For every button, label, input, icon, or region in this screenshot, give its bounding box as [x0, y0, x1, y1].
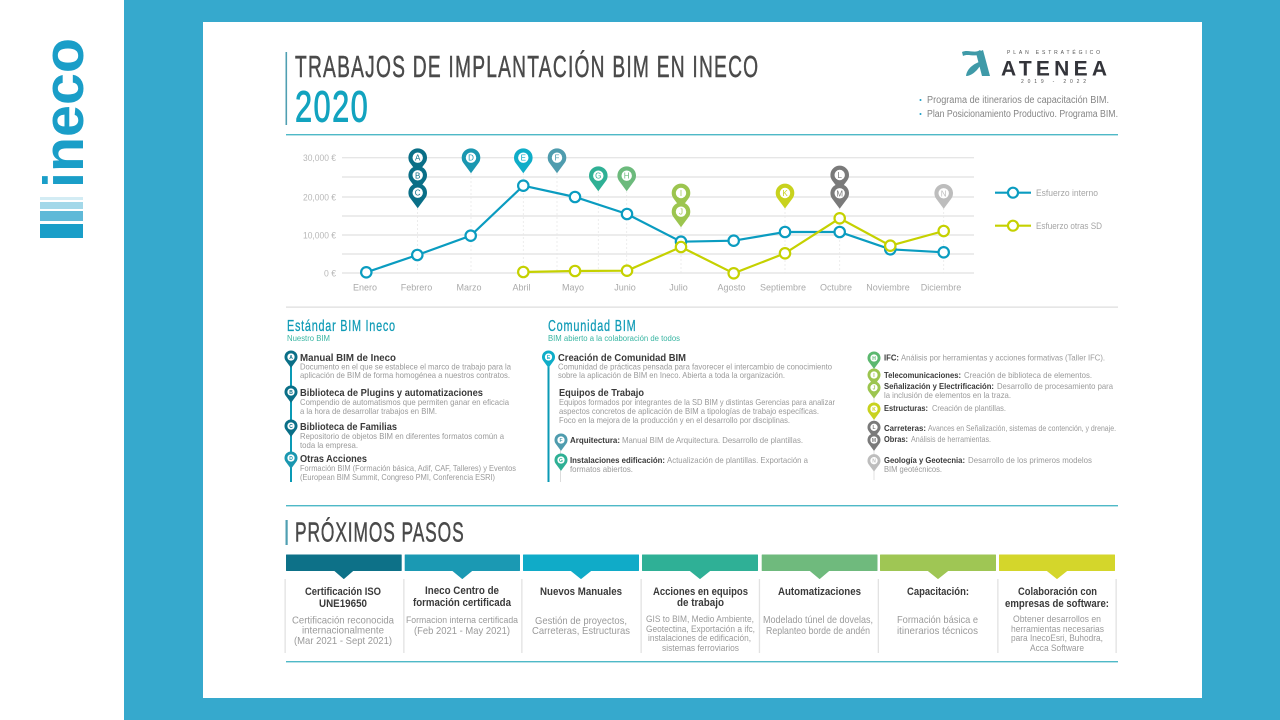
- x axis months: Agosto: [717, 282, 746, 292]
- x axis months: Abril: [512, 282, 531, 292]
- step 2: Ineco Centro de formación: (Feb 2021 - May 2021): [414, 625, 510, 637]
- chart milestone pins: [408, 148, 953, 227]
- x axis months: Febrero: [401, 282, 432, 292]
- item F: Arquitectura:: [570, 435, 620, 445]
- x axis months: Enero: [353, 282, 377, 292]
- item J: Señalización: Desarrollo de procesamiento para: [997, 381, 1113, 391]
- step 7: Colaboración con empresas: Obtener desarrollos en: [1013, 614, 1101, 624]
- step 7: Colaboración con empresas: empresas de software:: [1005, 598, 1109, 610]
- chart milestone pins: J: [679, 208, 683, 217]
- item: Equipos de Trabajo: Foco en la mejora de la producción y en el desarrollo por disciplinas.: [559, 415, 790, 425]
- x axis months: Noviembre: [866, 282, 910, 292]
- step 7: Colaboración con empresas: [1005, 586, 1109, 653]
- item D: Otras Acciones: [300, 453, 367, 465]
- item A: aplicación de BIM de forma homogénea a nuestros contratos.: [300, 370, 510, 380]
- item H: IFC: [867, 351, 1105, 369]
- item J: Señalización: la inclusión de elementos en la traza.: [884, 390, 1011, 400]
- chart milestone pins: K: [782, 189, 788, 198]
- item B: Biblioteca de Plugins y automatizaciones: [300, 387, 483, 399]
- item C: C: [289, 424, 293, 430]
- step 6: Capacitación: Formación básica e: [897, 614, 978, 626]
- chart legend: Esfuerzo otras SD: [1036, 221, 1102, 231]
- chart milestone pins: I: [680, 189, 682, 198]
- step 1: Certificación ISO: internacionalmente: [302, 624, 384, 636]
- item D: Formación BIM (Formación básica, Adif, CAF, Talleres) y Eventos: [300, 463, 516, 473]
- heading: Comunidad BIM: Comunidad BIM: [548, 317, 636, 335]
- item M: Obras: Obras:: [884, 434, 908, 444]
- item C: toda la empresa.: [300, 440, 358, 450]
- item E: Creación de Comunidad BIM: [558, 352, 686, 364]
- x axis months: Julio: [669, 282, 688, 292]
- next step banners: [286, 555, 1114, 578]
- step 4: Acciones en equipos: Geotectina, Exportación a ifc,: [646, 624, 755, 634]
- logo: Plan Estratégico Atenea: PLAN ESTRATÉGICO: [1007, 49, 1100, 56]
- panel: Estándar BIM Ineco: [284, 317, 516, 482]
- strategic programme bullets: Plan Posicionamiento Productivo. Programa BIM.: [927, 109, 1118, 120]
- item G: Actualización de plantillas. Exportación a: [667, 455, 808, 465]
- series: esfuerzo interno: [361, 180, 949, 277]
- item I: Telecomunicaciones: I: [873, 373, 875, 379]
- x axis months: Mayo: [562, 282, 584, 292]
- item: Equipos de Trabajo: aspectos concretos de aplicación de BIM a tipologías de trabajo específicas.: [559, 406, 819, 416]
- item G: formatos abiertos.: [570, 464, 633, 474]
- item: Equipos de Trabajo: Equipos de Trabajo: [559, 387, 644, 399]
- series: esfuerzo otras SD: [518, 213, 949, 278]
- step 5: Automatizaciones: [763, 586, 873, 637]
- item E: E: [547, 355, 551, 361]
- panel: disciplinas: [867, 351, 1116, 480]
- x axis months: Octubre: [820, 282, 852, 292]
- item M: Obras: Análisis de herramientas.: [911, 434, 991, 444]
- step 7: Colaboración con empresas: herramientas necesarias: [1011, 624, 1104, 634]
- item L: Carreteras: Avances en Señalización, sistemas de contención, y drenaje.: [928, 423, 1116, 433]
- step 2: Ineco Centro de formación: formación certificada: [413, 597, 512, 609]
- item C: Repositorio de objetos BIM en diferentes formatos común a: [300, 431, 504, 441]
- step 4: Acciones en equipos: instalaciones de edificación,: [648, 633, 751, 643]
- item K: Estructuras: Estructuras:: [884, 403, 928, 413]
- heading: Estándar BIM Ineco: Estándar BIM Ineco: [287, 317, 395, 335]
- item F: Manual BIM de Arquitectura. Desarrollo de plantillas.: [622, 435, 803, 445]
- x axis months: [353, 282, 961, 292]
- item A: A: [289, 355, 293, 361]
- item C: Biblioteca de Familias: [300, 421, 397, 433]
- item G: G: [559, 458, 563, 464]
- item A: Manual BIM de Ineco: [300, 352, 396, 364]
- step 6: Capacitación: itinerarios técnicos: [897, 625, 978, 637]
- item D: (European BIM Summit, Congreso PMI, Conferencia ESRI): [300, 472, 495, 482]
- step 2: Ineco Centro de formación: [406, 585, 518, 637]
- item M: Obras: M: [872, 438, 876, 444]
- item H: IFC: H: [872, 356, 876, 362]
- step 5: Automatizaciones: Replanteo borde de andén: [766, 625, 870, 637]
- step 7: Colaboración con empresas: Acca Software: [1030, 643, 1084, 653]
- item E: [542, 350, 832, 380]
- item D: [284, 451, 516, 482]
- item K: Estructuras: [867, 402, 1006, 420]
- item A: [284, 350, 511, 380]
- item M: Obras: [867, 433, 991, 451]
- step 5: Automatizaciones: Automatizaciones: [778, 586, 861, 598]
- item: Equipos de Trabajo: [559, 387, 835, 425]
- item B: a la hora de desarrollar trabajos en BIM.: [300, 406, 437, 416]
- item D: D: [289, 456, 293, 462]
- subheading: Nuestro BIM: Nuestro BIM: [287, 334, 330, 343]
- item G: Instalaciones edificación:: [570, 455, 665, 465]
- step 6: Capacitación: [897, 586, 978, 637]
- item J: Señalización: [867, 381, 1113, 400]
- logo: ineco: ineco: [32, 38, 96, 188]
- strategic programme bullets: [920, 95, 1118, 120]
- chart milestone pins: F: [555, 154, 560, 163]
- y axis labels: [303, 153, 336, 278]
- item L: Carreteras: L: [872, 425, 876, 431]
- y axis labels: 0 €: [324, 268, 336, 278]
- step 4: Acciones en equipos: GIS to BIM, Medio Ambiente,: [646, 614, 754, 624]
- chart milestone pins: B: [415, 171, 420, 180]
- step 7: Colaboración con empresas: para InecoEsri, Buhodra,: [1011, 633, 1103, 643]
- step 3: Nuevos Manuales: Carreteras, Estructuras: [532, 625, 630, 637]
- chart milestone pins: C: [415, 189, 421, 198]
- logo: Plan Estratégico Atenea: 2019 - 2022: [1021, 79, 1086, 85]
- step 4: Acciones en equipos: de trabajo: [677, 597, 724, 609]
- strategic programme bullets: Programa de itinerarios de capacitación BIM.: [927, 95, 1109, 106]
- y axis labels: 30,000 €: [303, 153, 336, 163]
- title block: [286, 49, 758, 132]
- step 3: Nuevos Manuales: Nuevos Manuales: [540, 586, 622, 598]
- chart milestone pins: N: [941, 189, 947, 198]
- step 3: Nuevos Manuales: [532, 586, 630, 637]
- step 4: Acciones en equipos: [646, 586, 755, 653]
- item E: Comunidad de prácticas pensada para favorecer el intercambio de conocimiento: [558, 362, 832, 372]
- year: 2020: [295, 83, 368, 132]
- line chart: monthly effort: [303, 148, 974, 292]
- item B: B: [289, 390, 293, 396]
- y axis labels: 20,000 €: [303, 192, 336, 202]
- item A: Documento en el que se establece el marco de trabajo para la: [300, 362, 511, 372]
- step 2: Ineco Centro de formación: Ineco Centro de: [425, 585, 499, 597]
- step 5: Automatizaciones: Modelado túnel de dovelas,: [763, 614, 873, 626]
- logo: Plan Estratégico Atenea: [962, 49, 1107, 85]
- x axis months: Septiembre: [760, 282, 806, 292]
- item H: IFC: IFC:: [884, 352, 899, 362]
- chart milestone pins: G: [595, 172, 601, 181]
- chart milestone pins: H: [624, 172, 630, 181]
- item K: Estructuras: Creación de plantillas.: [932, 403, 1006, 413]
- item B: Compendio de automatismos que permiten ganar en eficacia: [300, 397, 509, 407]
- step 4: Acciones en equipos: Acciones en equipos: [653, 586, 748, 598]
- item C: [284, 419, 504, 450]
- step 1: Certificación ISO: Certificación reconocida: [292, 614, 394, 626]
- chart milestone pins: A: [415, 154, 421, 163]
- step 7: Colaboración con empresas: Colaboración con: [1018, 586, 1097, 598]
- chart legend: [995, 188, 1102, 231]
- step 2: Ineco Centro de formación: Formacion interna certificada: [406, 615, 518, 625]
- step 3: Nuevos Manuales: Gestión de proyectos,: [535, 615, 627, 627]
- chart milestone pins: E: [521, 154, 526, 163]
- x axis months: Diciembre: [921, 282, 961, 292]
- item E: sobre la aplicación de BIM en Ineco. Abierta a toda la organización.: [558, 370, 785, 380]
- x axis months: Junio: [614, 282, 636, 292]
- chart milestone pins: M: [836, 189, 843, 198]
- step 1: Certificación ISO: (Mar 2021 - Sept 2021): [294, 635, 392, 647]
- step 1: Certificación ISO: Certificación ISO: [305, 586, 381, 598]
- step 4: Acciones en equipos: sistemas ferroviarios: [662, 643, 739, 653]
- item G: [554, 453, 808, 474]
- item L: Carreteras: [867, 421, 1116, 438]
- item J: Señalización: Señalización y Electrificación:: [884, 381, 994, 391]
- item N: Geología: [867, 454, 1092, 474]
- item J: Señalización: J: [873, 386, 876, 392]
- chart milestone pins: L: [837, 171, 842, 180]
- white content card: [203, 22, 1202, 698]
- heading: Próximos pasos: PRÓXIMOS PASOS: [295, 516, 464, 548]
- item I: Telecomunicaciones: Creación de biblioteca de elementos.: [964, 370, 1092, 380]
- step 1: Certificación ISO: UNE19650: [319, 598, 367, 610]
- item N: Geología: N: [872, 458, 876, 464]
- item I: Telecomunicaciones: [867, 368, 1092, 386]
- item L: Carreteras: Carreteras:: [884, 423, 926, 433]
- chart milestone pins: D: [468, 154, 474, 163]
- item H: IFC: Análisis por herramientas y acciones formativas (Taller IFC).: [901, 352, 1105, 362]
- x axis months: Marzo: [456, 282, 482, 292]
- item N: Geología: Desarrollo de los primeros modelos: [968, 455, 1092, 465]
- subheading: BIM abierto: BIM abierto a la colaboración de todos: [548, 334, 680, 343]
- item F: F: [559, 438, 563, 444]
- item K: Estructuras: K: [872, 407, 876, 413]
- item: Equipos de Trabajo: Equipos formados por integrantes de la SD BIM y distintas Gerencias para analizar: [559, 397, 835, 407]
- item I: Telecomunicaciones: Telecomunicaciones:: [884, 370, 961, 380]
- logo: Plan Estratégico Atenea: ATENEA: [1001, 58, 1107, 80]
- step 1: Certificación ISO: [292, 586, 394, 647]
- item F: [554, 433, 803, 451]
- panel: Comunidad BIM: [542, 317, 835, 482]
- chart legend: Esfuerzo interno: [1036, 188, 1098, 198]
- step 6: Capacitación: Capacitación:: [907, 586, 969, 598]
- y axis labels: 10,000 €: [303, 230, 336, 240]
- item N: Geología: Geología y Geotecnia:: [884, 455, 965, 465]
- item N: Geología: BIM geotécnicos.: [884, 464, 942, 474]
- title: TRABAJOS DE IMPLANTACIÓN BIM EN INECO: [295, 49, 758, 84]
- item B: [284, 385, 509, 416]
